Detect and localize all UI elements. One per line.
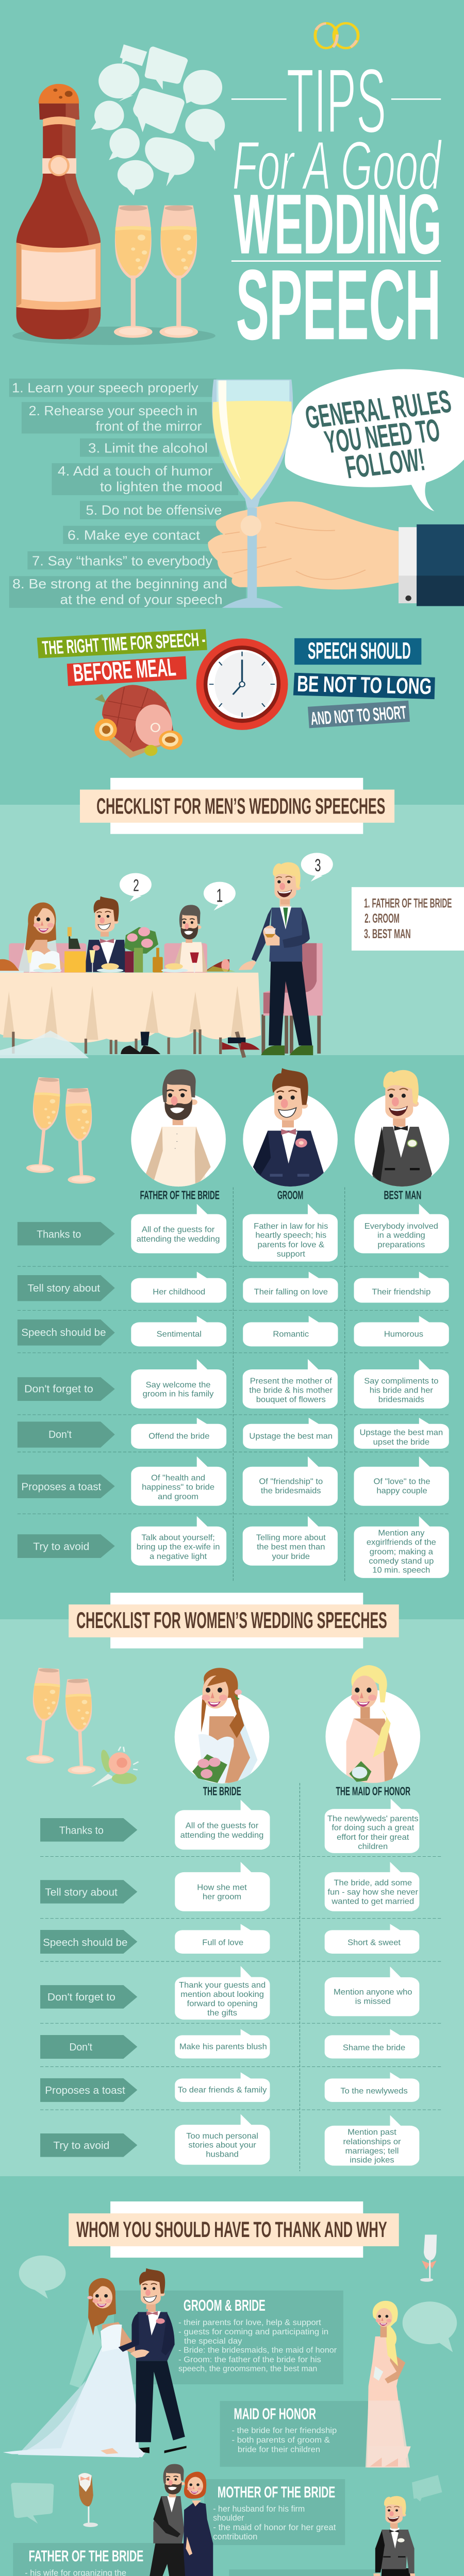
illustration: boutonniere bbox=[91, 1747, 139, 1787]
bubble: number 3 bbox=[301, 853, 333, 882]
row: try to avoid: marriages; tell bbox=[345, 2146, 399, 2156]
row: try to avoid: comedy stand up bbox=[369, 1556, 434, 1566]
row: don't: Don't bbox=[69, 2042, 92, 2053]
row: speech should be: Humorous bbox=[384, 1330, 423, 1339]
men's checklist table bbox=[18, 1068, 449, 1582]
row: tell story about: Their friendship bbox=[372, 1287, 430, 1296]
column headers: THE BRIDE bbox=[203, 1784, 241, 1798]
list of rules: to lighten the mood bbox=[100, 480, 223, 495]
bubble: number 2 bbox=[120, 873, 152, 902]
row: don't forget to: Say compliments to bbox=[364, 1377, 438, 1386]
heading: whom to thank bbox=[69, 2201, 399, 2258]
illustration: groom at the table bbox=[85, 896, 127, 972]
list of rules: 1. Learn your speech properly bbox=[12, 381, 198, 396]
row: tell story about: her groom bbox=[203, 1892, 241, 1902]
row: try to avoid: Mention any bbox=[378, 1529, 425, 1538]
row: don't bbox=[40, 2029, 419, 2059]
row: try to avoid bbox=[40, 2114, 419, 2166]
row: speech should be: Full of love bbox=[202, 1938, 243, 1947]
panel: groom and bride: - Groom: the father of the bride for his bbox=[178, 2354, 321, 2364]
panel: mother of the bride: - the maid of honor for her great bbox=[213, 2522, 336, 2532]
panel: groom and bride bbox=[114, 2291, 343, 2384]
portrait: groom bbox=[243, 1068, 338, 1188]
row: proposes a toast: To the newlyweds bbox=[340, 2087, 408, 2095]
women's checklist table bbox=[40, 1783, 441, 2171]
row: don't: upset the bride bbox=[373, 1437, 429, 1447]
bubble: number 1 bbox=[204, 882, 236, 910]
row: try to avoid: stories about your bbox=[188, 2141, 256, 2150]
row: proposes a toast: happy couple bbox=[376, 1486, 427, 1496]
row: don't bbox=[18, 1418, 449, 1449]
illustration: best man standing bbox=[239, 862, 313, 1055]
speech bubble: general rules bbox=[285, 369, 464, 511]
row: tell story about: Tell story about bbox=[27, 1283, 100, 1294]
list of rules: 7. Say “thanks” to everybody bbox=[32, 554, 212, 568]
women's checklist header bbox=[26, 1592, 420, 1798]
row: thanks to: Father in law for his bbox=[254, 1222, 328, 1231]
row: don't: Offend the bride bbox=[148, 1432, 209, 1440]
list of rules: 5. Do not be offensive bbox=[86, 503, 222, 518]
icon: clock bbox=[196, 638, 288, 730]
column headers bbox=[140, 1189, 421, 1202]
row: don't forget to: bridesmaids bbox=[378, 1395, 424, 1404]
general rules section: THE RIGHT TIME FOR SPEECH - bbox=[41, 629, 206, 659]
panel: mother of the bride bbox=[204, 2479, 345, 2545]
row: thanks to: Everybody involved bbox=[364, 1222, 438, 1231]
panel: maid of honor: MAID OF HONOR bbox=[234, 2405, 316, 2422]
row: don't forget to: Mention anyone who bbox=[334, 1988, 412, 1996]
row: don't: Make his parents blush bbox=[179, 2042, 267, 2052]
panel: groom and bride: - Bride: the bridesmaids, the maid of honor bbox=[178, 2345, 337, 2354]
title bbox=[231, 49, 442, 361]
row: try to avoid: 10 min. speech bbox=[372, 1566, 430, 1575]
icon: wedding rings bbox=[315, 23, 358, 48]
portrait: best man bbox=[355, 1070, 449, 1188]
row: don't forget to: Thank your guests and bbox=[179, 1980, 266, 1990]
row: proposes a toast: Proposes a toast bbox=[45, 2085, 125, 2096]
row: thanks to: support bbox=[277, 1249, 305, 1259]
row: proposes a toast: the bridesmaids bbox=[261, 1486, 321, 1496]
illustration: tablecloth bbox=[0, 973, 261, 1058]
illustration: bottle bbox=[12, 84, 216, 345]
illustration: table settings bbox=[0, 927, 235, 973]
icon: tuxedo champagne glass bbox=[78, 2473, 98, 2527]
row: don't: Upstage the best man bbox=[359, 1428, 443, 1437]
row: try to avoid: bring up the ex-wife in bbox=[137, 1543, 220, 1551]
panel: maid of honor: bride for their children bbox=[238, 2445, 320, 2454]
row: proposes a toast: Of "love" to the bbox=[373, 1477, 430, 1486]
illustration: chairs bbox=[9, 943, 323, 1054]
row: thanks to: Thanks to bbox=[37, 1229, 81, 1241]
row: proposes a toast: and groom bbox=[158, 1492, 198, 1501]
bubble: number 2: 2 bbox=[133, 876, 139, 895]
panel: groom and bride: GROOM & BRIDE bbox=[184, 2297, 266, 2314]
row: thanks to: attending the wedding bbox=[137, 1234, 220, 1244]
label: the right time for speech bbox=[37, 629, 207, 687]
list of rules: 2. Rehearse your speech in bbox=[29, 403, 197, 418]
row: try to avoid: relationships or bbox=[343, 2137, 401, 2146]
decorative bubble bbox=[403, 2301, 457, 2352]
row: don't forget to: groom in his family bbox=[143, 1389, 214, 1399]
illustration: bride standing bbox=[18, 2278, 139, 2458]
row: don't forget to: Present the mother of bbox=[250, 1377, 332, 1386]
row: try to avoid: Telling more about bbox=[256, 1533, 326, 1543]
label: speech should be not too long bbox=[293, 638, 435, 729]
illustration: champagne glass bbox=[159, 206, 198, 338]
list of rules: 4. Add a touch of humor bbox=[58, 464, 212, 479]
men's checklist heading and scene bbox=[0, 778, 464, 1058]
row: thanks to: preparations bbox=[377, 1240, 425, 1249]
row: try to avoid: groom; making a bbox=[370, 1547, 434, 1556]
background: women's checklist band bbox=[0, 1619, 464, 2176]
row: speech should be: Romantic bbox=[273, 1330, 309, 1339]
row: thanks to: heartly speech; his bbox=[255, 1231, 326, 1240]
row: try to avoid: exgirlfriends of the bbox=[367, 1538, 436, 1547]
panel: maid of honor: - both parents of groom & bbox=[231, 2435, 330, 2445]
row: tell story about: Their falling on love bbox=[254, 1287, 328, 1296]
list of rules bbox=[9, 379, 246, 608]
icon: white champagne glass bbox=[420, 2235, 437, 2282]
row: speech should be: Speech should be bbox=[43, 1937, 127, 1948]
list of rules: 6. Make eye contact bbox=[68, 528, 201, 543]
men's checklist table: BEST MAN bbox=[384, 1189, 421, 1202]
column headers: FATHER OF THE BRIDE bbox=[140, 1189, 220, 1202]
row: don't forget to: the gifts bbox=[207, 2008, 237, 2018]
illustration: father at the table bbox=[172, 905, 207, 972]
row: thanks to: parents for love & bbox=[257, 1240, 324, 1249]
heading: checklist for women bbox=[69, 1592, 399, 1649]
row: don't forget to: Don't forget to bbox=[47, 1992, 115, 2003]
row: don't forget to bbox=[18, 1359, 449, 1409]
panel: maid of honor: - the bride for her friendship bbox=[231, 2426, 337, 2435]
bubble: number 1: 1 bbox=[217, 886, 223, 906]
row: try to avoid: Too much personal bbox=[186, 2131, 258, 2141]
row: speech should be bbox=[18, 1316, 449, 1346]
illustration: groom standing bbox=[119, 2268, 185, 2442]
row: don't forget to: the bride & his mother bbox=[249, 1386, 333, 1395]
row: don't forget to: forward to opening bbox=[187, 1999, 258, 2008]
closing section bbox=[0, 2446, 464, 2576]
row: tell story about bbox=[18, 1272, 449, 1303]
row: proposes a toast: Proposes a toast bbox=[21, 1481, 102, 1493]
row: proposes a toast bbox=[40, 2072, 419, 2102]
row: try to avoid: Talk about yourself; bbox=[141, 1533, 215, 1543]
illustration: father and mother of the bride bbox=[144, 2464, 213, 2576]
row: tell story about: Her childhood bbox=[153, 1287, 205, 1296]
list of rules: 8. Be strong at the beginning and bbox=[12, 577, 227, 591]
illustration: best man standing bbox=[373, 2496, 416, 2576]
row: thanks to: The newlyweds' parents bbox=[327, 1814, 419, 1823]
column headers bbox=[203, 1784, 410, 1798]
row: try to avoid bbox=[18, 1516, 449, 1578]
illustration: ham on board bbox=[94, 685, 183, 758]
portrait: father of the bride bbox=[131, 1070, 226, 1188]
row: thanks to bbox=[18, 1204, 449, 1262]
row: tell story about: How she met bbox=[197, 1883, 247, 1892]
row: speech should be: Sentimental bbox=[157, 1330, 202, 1339]
panel: groom and bride: the special day bbox=[184, 2336, 242, 2346]
list of rules: at the end of your speech bbox=[60, 592, 223, 607]
row: thanks to: Thanks to bbox=[59, 1825, 104, 1837]
panel: groom and bride: speech, the groomsmen, the best man bbox=[178, 2364, 317, 2373]
panel: mother of the bride: contribution bbox=[213, 2532, 257, 2541]
row: tell story about: Tell story about bbox=[45, 1887, 118, 1899]
row: thanks to: for doing such a great bbox=[332, 1823, 415, 1833]
row: tell story about: wanted to get married bbox=[331, 1897, 414, 1906]
illustration: bride at the table bbox=[18, 903, 65, 972]
panel: best man bbox=[229, 2569, 377, 2576]
column headers: GROOM bbox=[277, 1189, 303, 1202]
row: don't forget to: his bride and her bbox=[370, 1386, 433, 1395]
illustration: hand holding glass bbox=[208, 380, 464, 608]
decorative bubble bbox=[19, 2256, 65, 2299]
row: thanks to: effort for their great bbox=[337, 1833, 409, 1842]
row: speech should be: Speech should be bbox=[21, 1327, 106, 1338]
row: don't forget to: bouquet of flowers bbox=[256, 1395, 326, 1404]
illustration: two champagne glasses bbox=[26, 1077, 96, 1184]
row: tell story about: fun - say how she never bbox=[328, 1888, 419, 1897]
closing section: FATHER OF THE BRIDE bbox=[29, 2548, 143, 2565]
panel: mother of the bride: - her husband for his firm bbox=[213, 2504, 305, 2514]
row: proposes a toast: Of "health and bbox=[151, 1473, 205, 1483]
bubble: number 3: 3 bbox=[314, 856, 321, 875]
row: thanks to: children bbox=[358, 1842, 388, 1851]
row: tell story about bbox=[40, 1862, 419, 1911]
illustration: speech bubbles bbox=[91, 44, 225, 195]
row: tell story about: The bride, add some bbox=[334, 1878, 412, 1887]
row: don't: Shame the bride bbox=[343, 2043, 405, 2052]
whom to thank section bbox=[18, 2201, 457, 2467]
row: try to avoid: Try to avoid bbox=[53, 2140, 109, 2151]
general rules section bbox=[9, 369, 464, 758]
row: don't forget to bbox=[40, 1966, 419, 2020]
background: men's scene band bbox=[0, 805, 464, 1055]
illustration: two champagne glasses bbox=[26, 1668, 96, 1775]
row: thanks to: All of the guests for bbox=[142, 1225, 215, 1234]
row: don't: Don't bbox=[48, 1429, 72, 1440]
illustration: maid of honor standing bbox=[366, 2301, 410, 2467]
row: try to avoid: a negative light bbox=[150, 1552, 207, 1561]
row: thanks to bbox=[40, 1799, 419, 1853]
heading: checklist for men bbox=[80, 778, 394, 834]
row: try to avoid: the best men than bbox=[257, 1543, 325, 1551]
decorative bubble bbox=[412, 2475, 442, 2501]
panel: father of the bride bbox=[13, 2543, 158, 2576]
illustration: bride and groom feet (continuation) bbox=[3, 2446, 411, 2466]
panel: groom and bride: - their parents for love, help & support bbox=[178, 2317, 321, 2327]
decorative bubble bbox=[11, 2483, 54, 2523]
row: don't forget to: Say welcome the bbox=[146, 1380, 210, 1389]
list of rules: front of the mirror bbox=[95, 419, 202, 434]
panel: maid of honor bbox=[220, 2401, 371, 2467]
label: the right time for speech: BEFORE MEAL bbox=[72, 653, 177, 687]
row: try to avoid: Mention past bbox=[347, 2128, 396, 2137]
row: speech should be: Short & sweet bbox=[347, 1938, 401, 1947]
panel: mother of the bride: shoulder bbox=[213, 2513, 244, 2522]
header section bbox=[12, 23, 442, 361]
row: thanks to: attending the wedding bbox=[180, 1831, 263, 1840]
row: proposes a toast: Of "friendship" to bbox=[259, 1477, 323, 1486]
legend: speaker order: 2. GROOM bbox=[364, 911, 400, 926]
row: proposes a toast bbox=[18, 1456, 449, 1506]
row: don't forget to: is missed bbox=[355, 1997, 391, 2006]
portrait: the bride bbox=[175, 1668, 269, 1784]
row: don't forget to: mention about looking bbox=[180, 1990, 264, 1999]
row: speech should be bbox=[40, 1924, 419, 1954]
illustration: champagne glass bbox=[114, 206, 153, 338]
portrait: the maid of honor bbox=[325, 1665, 420, 1783]
row: thanks to: in a wedding bbox=[377, 1231, 425, 1240]
row: try to avoid: Try to avoid bbox=[33, 1541, 89, 1553]
row: thanks to: All of the guests for bbox=[186, 1821, 259, 1831]
list of rules: 3. Limit the alcohol bbox=[88, 441, 208, 456]
row: don't: Upstage the best man bbox=[249, 1432, 333, 1440]
row: try to avoid: inside jokes bbox=[350, 2156, 394, 2165]
row: try to avoid: your bride bbox=[272, 1552, 310, 1561]
row: try to avoid: husband bbox=[206, 2150, 239, 2159]
panel: groom and bride: - guests for coming and participating in bbox=[178, 2327, 328, 2336]
row: proposes a toast: To dear friends & family bbox=[178, 2086, 267, 2095]
legend: speaker order bbox=[352, 887, 464, 951]
row: don't forget to: Don't forget to bbox=[24, 1383, 93, 1395]
row: proposes a toast: happiness" to bride bbox=[142, 1483, 214, 1492]
